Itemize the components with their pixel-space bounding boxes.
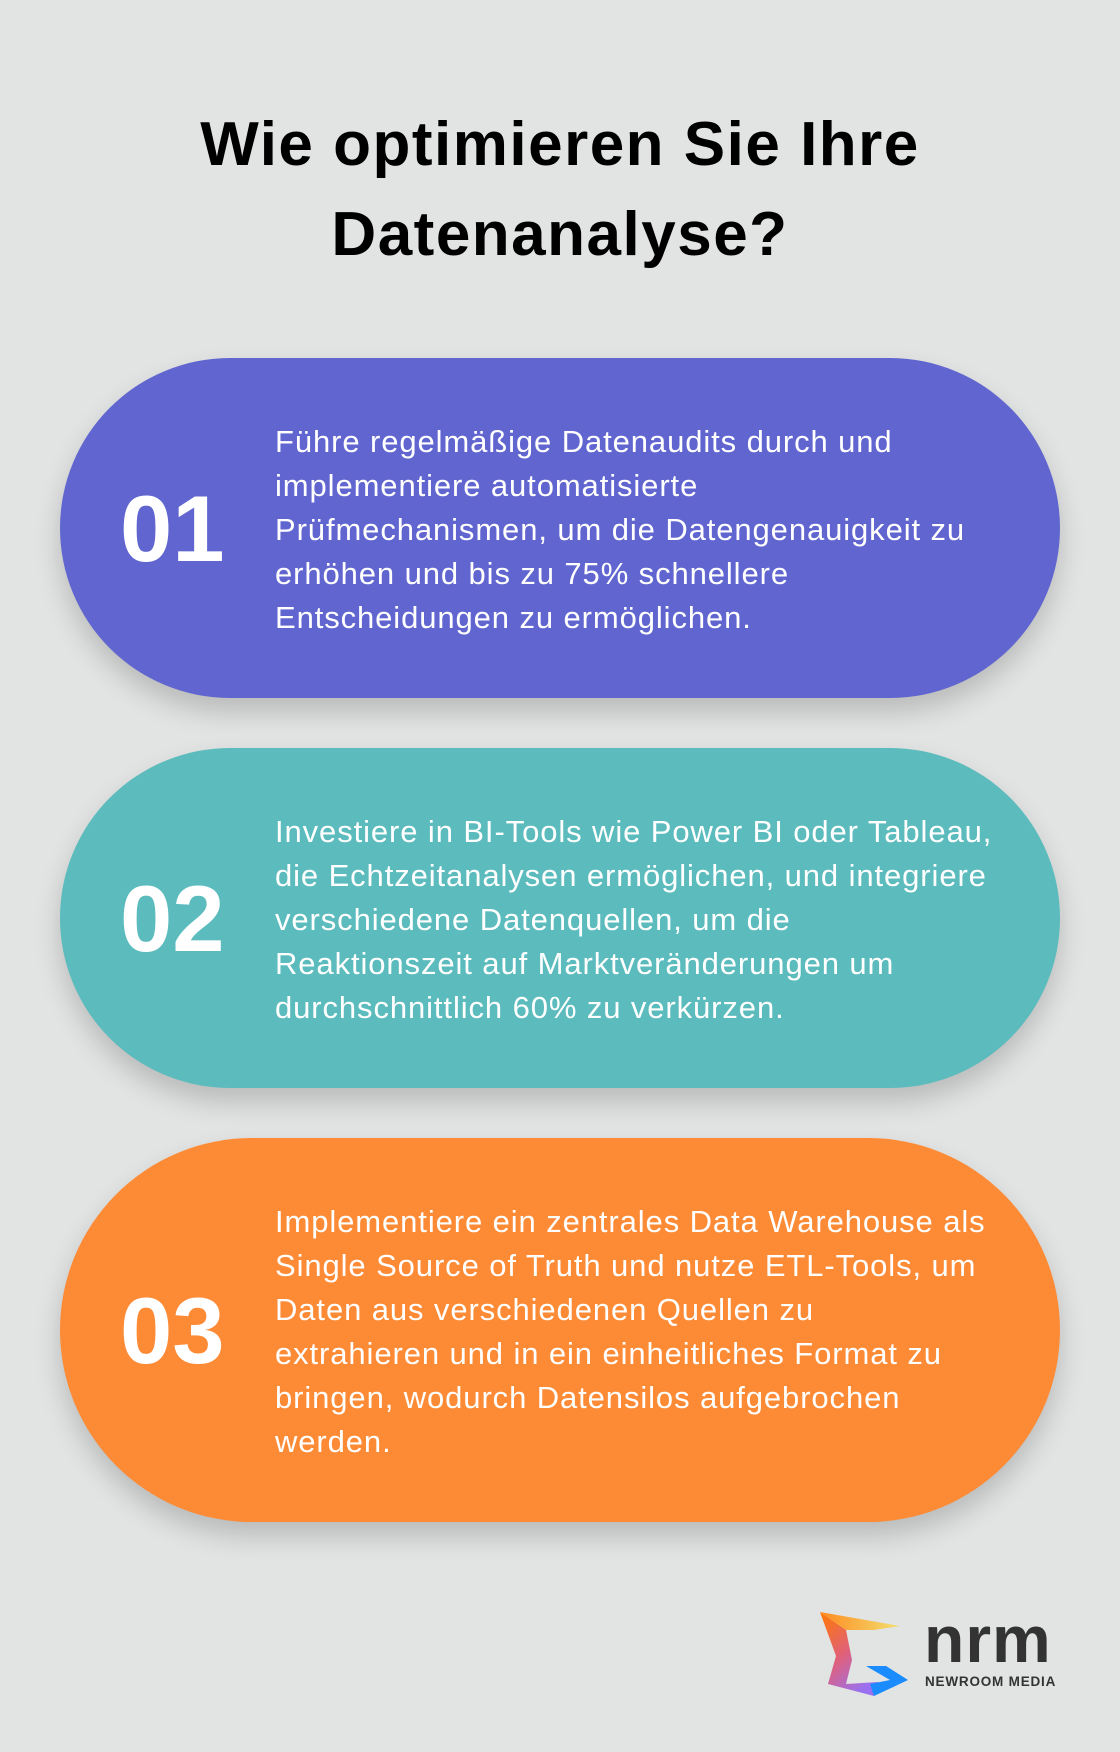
text 03: bringen, wodurch Datensilos aufgebrochen [275, 1380, 900, 1415]
number 03: 03 [120, 1278, 225, 1383]
title: Datenanalyse? [331, 200, 789, 269]
text 01: Prüfmechanismen, um die Datengenauigkeit zu [275, 512, 965, 547]
text 01: Führe regelmäßige Datenaudits durch und [275, 424, 893, 459]
logo text newroom media: NEWROOM MEDIA [925, 1674, 1056, 1689]
logo [820, 1602, 1056, 1696]
panel: step 03 [60, 1138, 1060, 1522]
icon: logo mark [820, 1612, 908, 1696]
text 03: extrahieren und in ein einheitliches Format zu [275, 1336, 942, 1371]
text 02: Reaktionszeit auf Marktveränderungen um [275, 946, 894, 981]
text 03: Single Source of Truth und nutze ETL-Tools, um [275, 1248, 976, 1283]
text 03 [275, 1204, 986, 1459]
text 02: durchschnittlich 60% zu verkürzen. [275, 990, 785, 1025]
text 02: verschiedene Datenquellen, um die [275, 902, 791, 937]
number 02: 02 [120, 866, 225, 971]
text 01 [275, 424, 965, 635]
title: Wie optimieren Sie Ihre [200, 110, 920, 179]
text 03: Daten aus verschiedenen Quellen zu [275, 1292, 814, 1327]
text 02: die Echtzeitanalysen ermöglichen, und integriere [275, 858, 987, 893]
title [200, 110, 920, 269]
text 01: implementiere automatisierte [275, 468, 698, 503]
number 01: 01 [120, 476, 225, 581]
logo text nrm: nrm [924, 1602, 1052, 1676]
text 02: Investiere in BI-Tools wie Power BI oder Tableau, [275, 814, 992, 849]
text 02 [275, 814, 992, 1025]
text 01: Entscheidungen zu ermöglichen. [275, 600, 752, 635]
text 01: erhöhen und bis zu 75% schnellere [275, 556, 789, 591]
panel: step 01 [60, 358, 1060, 698]
panel: step 02 [60, 748, 1060, 1088]
text 03: Implementiere ein zentrales Data Warehouse als [275, 1204, 986, 1239]
text 03: werden. [275, 1424, 392, 1459]
